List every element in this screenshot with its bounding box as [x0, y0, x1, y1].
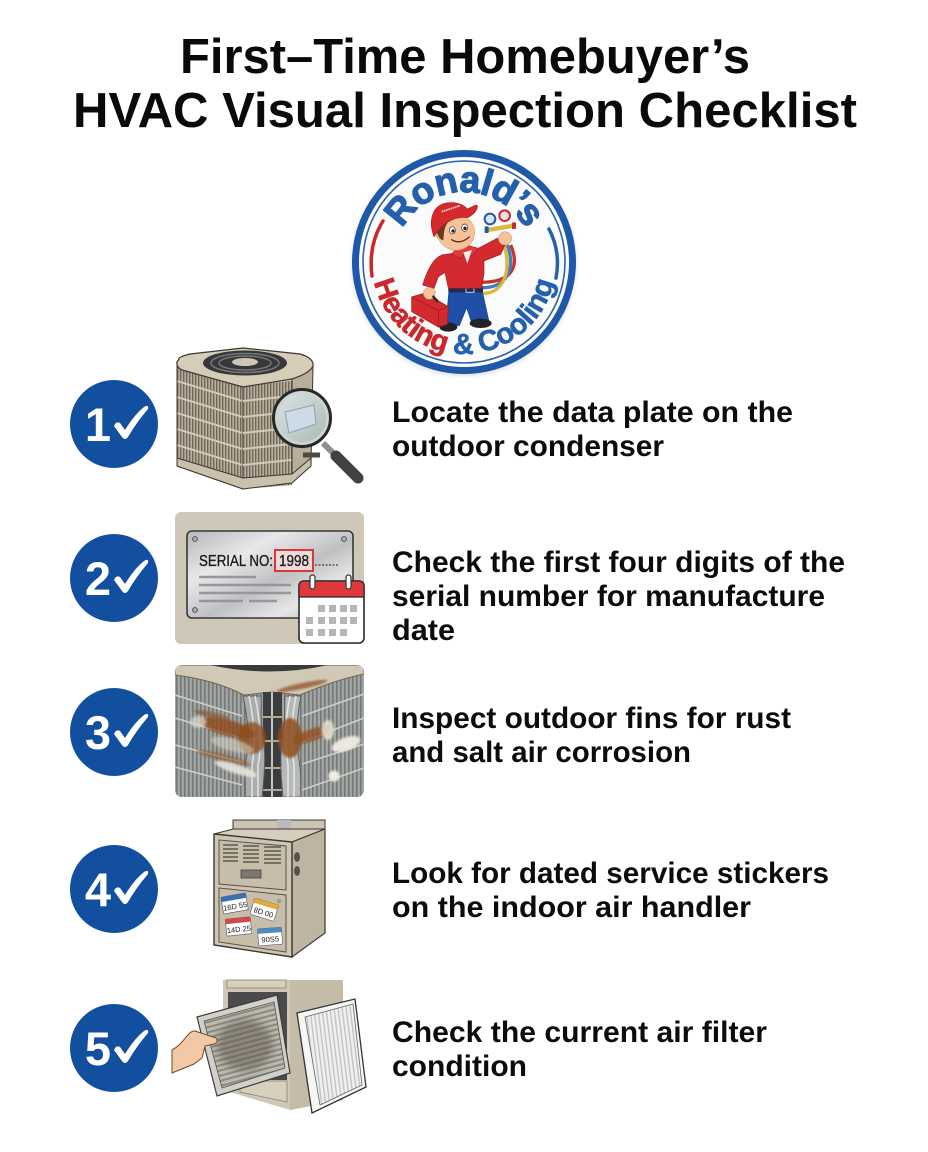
icon: corroded condenser fins	[175, 665, 364, 797]
step 5 text: Check the current air filter	[392, 1016, 767, 1049]
step 1 text: outdoor condenser	[392, 430, 664, 463]
hoses	[482, 245, 514, 282]
sticker: blue bottom-right: 90S5	[261, 934, 279, 945]
step 1	[70, 348, 793, 489]
step 4 badge	[70, 845, 158, 933]
step 1 text: Locate the data plate on the	[392, 396, 793, 429]
gauges and manifold	[485, 214, 495, 224]
logo name top: Ronald’s	[382, 168, 540, 227]
eyes & smile	[449, 227, 455, 234]
step 1 badge	[70, 380, 158, 468]
step 1 text	[392, 396, 793, 463]
icon: swapping the air filter	[172, 980, 366, 1113]
neck & face	[437, 214, 475, 250]
step 4 text	[392, 857, 829, 924]
icon: outdoor condenser with magnifier	[177, 348, 358, 489]
step 2 text	[392, 546, 845, 647]
step 2 badge	[70, 534, 158, 622]
sticker: yellow: 8D 00	[253, 905, 274, 920]
step 3 text: Inspect outdoor fins for rust	[392, 702, 791, 735]
step 2 text: Check the first four digits of the	[392, 546, 845, 579]
step 5 badge: 5	[85, 1022, 111, 1075]
logo mascot	[412, 203, 516, 332]
icon: data plate and calendar	[175, 512, 364, 644]
sticker: blue top-left: 16D 55	[222, 900, 248, 913]
title: First–Time Homebuyer’s	[180, 30, 750, 84]
cap	[431, 203, 477, 237]
icon: data plate and calendar: SERIAL NO:	[199, 553, 273, 570]
title: HVAC Visual Inspection Checklist	[73, 84, 857, 138]
step 5	[70, 980, 767, 1113]
icon: data plate and calendar: 1998	[279, 553, 309, 570]
step 4 badge: 4	[85, 863, 111, 916]
icon: indoor air handler with stickers	[214, 820, 325, 957]
step 2 badge: 2	[85, 552, 111, 605]
hand and toolbox	[412, 293, 448, 327]
logo side accents	[371, 221, 383, 276]
title	[73, 30, 857, 138]
sticker: red: 14D 25	[226, 924, 251, 935]
step 3 badge: 3	[85, 706, 111, 759]
step 3	[70, 665, 791, 797]
step 2 text: serial number for manufacture	[392, 580, 825, 613]
step 5 text: condition	[392, 1050, 527, 1083]
step 4	[70, 820, 829, 957]
step 3 badge	[70, 688, 158, 776]
pants	[446, 290, 489, 326]
step 4 text: on the indoor air handler	[392, 891, 751, 924]
logo: Ronald's Heating & Cooling	[350, 150, 578, 378]
step 3 text: and salt air corrosion	[392, 736, 691, 769]
step 3 text	[392, 702, 791, 769]
logo name bottom: Heating & Cooling	[374, 277, 558, 356]
step 5 badge	[70, 1004, 158, 1092]
step 2	[70, 512, 845, 647]
step 5 text	[392, 1016, 767, 1083]
step 1 badge: 1	[85, 398, 111, 451]
step 4 text: Look for dated service stickers	[392, 857, 829, 890]
step 2 text: date	[392, 614, 455, 647]
shoes	[439, 322, 457, 332]
shirt	[423, 238, 505, 288]
